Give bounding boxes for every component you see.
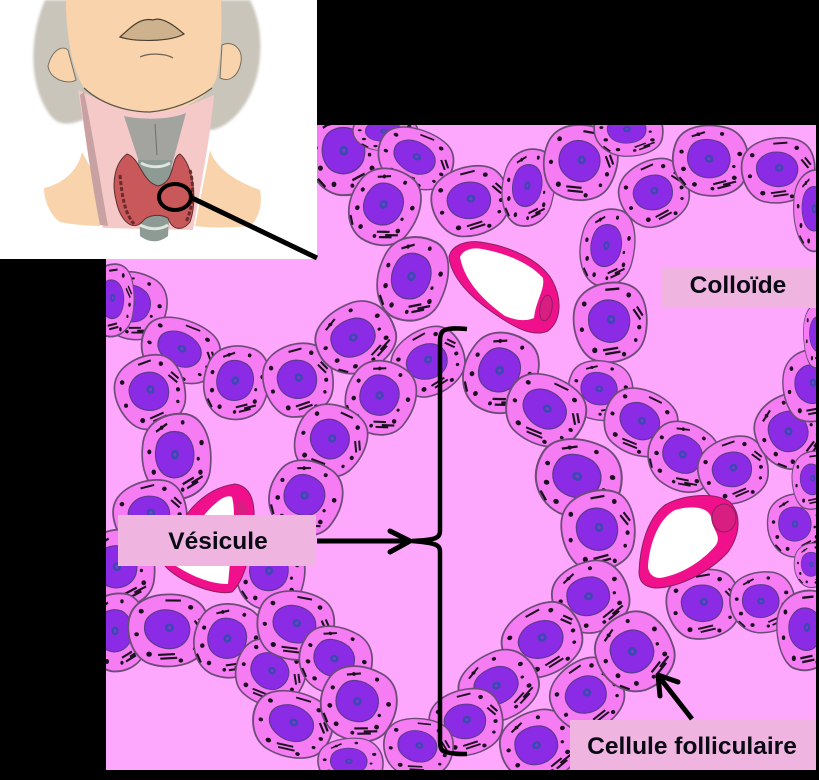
ears [48,44,241,82]
vessel: right [639,496,738,588]
inset: neck and thyroid illustration [0,0,317,259]
label: Cellule folliculaire [570,720,816,770]
thyroid [114,154,194,228]
face [66,0,221,112]
panel: follicle histology [82,104,819,780]
mouth [120,19,184,40]
trachea [124,113,186,165]
vessel: left [165,484,254,593]
label: Colloïde [661,267,816,308]
trachea lower [138,160,172,241]
label: Vésicule: Vésicule [168,528,268,555]
arrow: Vésicule to brace [317,531,410,552]
brace [412,328,467,754]
hair [33,0,260,130]
label: Cellule folliculaire: Cellule folliculaire [587,733,797,760]
label: Vésicule [118,515,316,566]
shoulders [44,150,261,228]
vessel: top [449,242,559,333]
neck muscles [78,90,214,230]
arrow: Cellule folliculaire [658,675,692,719]
follicular cells [82,104,819,780]
zoom circle and leader line [159,184,317,258]
label: Colloïde: Colloïde [690,272,786,299]
